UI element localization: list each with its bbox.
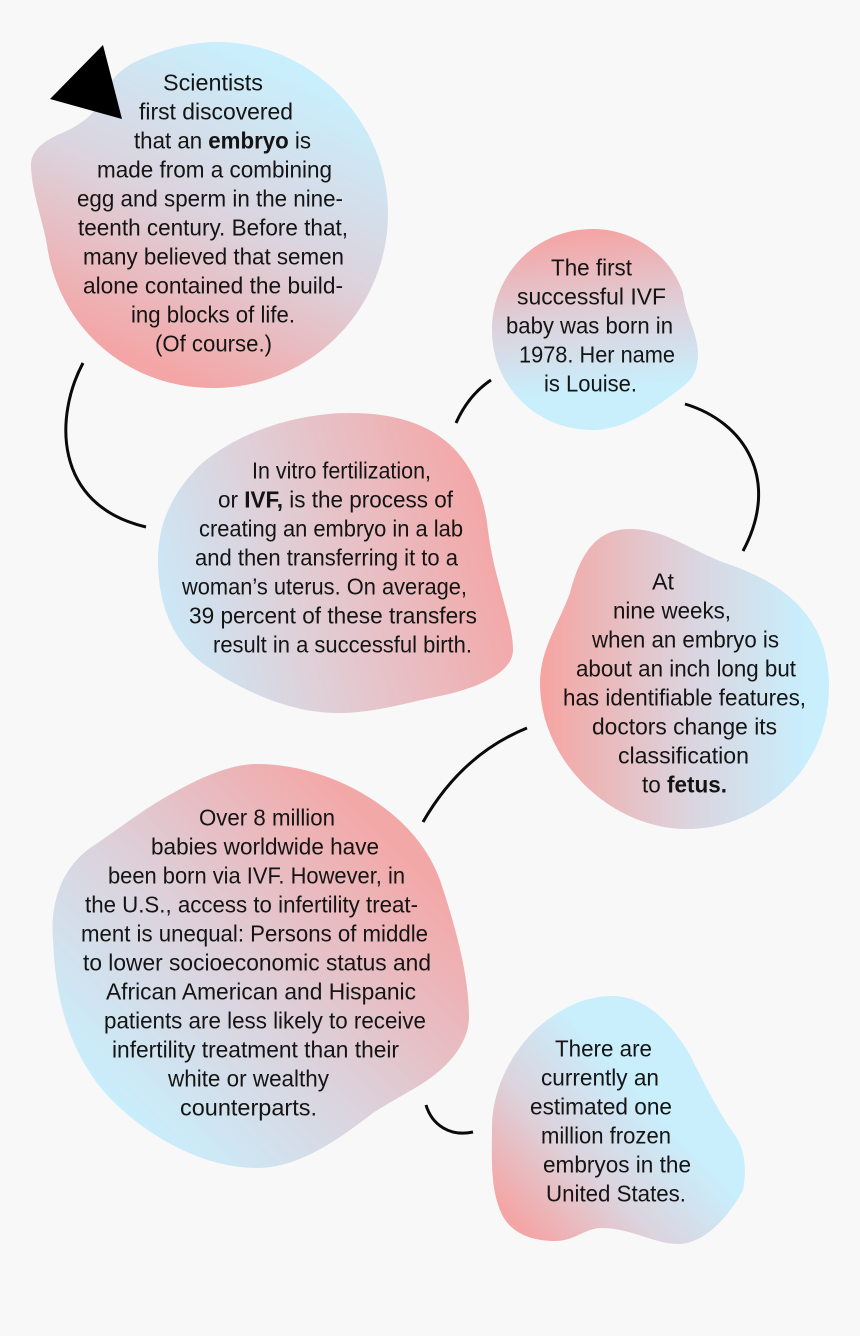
text: nine weeks fetus: At	[652, 568, 675, 594]
icon: black triangle arrowhead	[50, 45, 122, 119]
text: frozen embryos: million frozen	[541, 1122, 671, 1148]
arrow: babies worldwide to frozen embryos	[426, 1105, 473, 1133]
blob: babies worldwide and access	[52, 764, 469, 1168]
arrow: IVF to first baby	[456, 380, 491, 423]
text: embryo discovery: first discovered	[139, 98, 293, 124]
panel: babies worldwide and access	[52, 764, 469, 1168]
text: embryo discovery: egg and sperm in the nine-	[77, 186, 343, 212]
arrow: first baby to nine weeks	[685, 404, 759, 551]
arrow: embryo to IVF	[66, 363, 146, 527]
panel: nine weeks fetus	[540, 529, 829, 829]
text: nine weeks fetus: about an inch long but	[576, 656, 797, 682]
text: frozen embryos: United States.	[546, 1180, 686, 1206]
text: babies worldwide and access: Over 8 million	[199, 804, 335, 830]
text: embryo discovery: made from a combining	[97, 156, 332, 182]
text: what is IVF: 39 percent of these transfers	[189, 602, 477, 628]
blob: frozen embryos	[492, 996, 745, 1244]
text: first IVF baby: is Louise.	[544, 370, 637, 396]
text: frozen embryos	[530, 1036, 691, 1206]
text: first IVF baby: The first	[551, 254, 633, 280]
text: embryo discovery: Scientists	[163, 70, 263, 96]
text: nine weeks fetus	[563, 568, 806, 798]
text: babies worldwide and access: babies worldwide have	[151, 834, 379, 860]
text: frozen embryos: estimated one	[530, 1094, 672, 1120]
text: frozen embryos: currently an	[541, 1064, 659, 1090]
text: embryo discovery: that an embryo is	[134, 128, 311, 154]
panel: first IVF baby	[492, 229, 698, 430]
text: what is IVF: and then transferring it to a	[195, 544, 458, 570]
text: babies worldwide and access	[81, 804, 431, 1120]
text: nine weeks fetus: has identifiable features,	[563, 684, 806, 710]
text: embryo discovery	[77, 70, 348, 356]
text: babies worldwide and access: white or wealthy	[167, 1066, 329, 1092]
text: what is IVF: or IVF, is the process of	[218, 486, 454, 512]
text: nine weeks fetus: doctors change its	[592, 714, 777, 740]
text: embryo discovery: ing blocks of life.	[131, 302, 295, 328]
text: babies worldwide and access: infertility treatment than their	[112, 1036, 399, 1062]
text: babies worldwide and access: to lower socioeconomic status and	[83, 950, 431, 976]
text: nine weeks fetus: to fetus.	[642, 772, 727, 798]
panel: frozen embryos	[492, 996, 745, 1244]
text: babies worldwide and access: counterparts.	[180, 1094, 317, 1120]
text: what is IVF: creating an embryo in a lab	[199, 516, 463, 542]
blob: first IVF baby	[492, 229, 698, 430]
text: babies worldwide and access: African American and Hispanic	[106, 978, 416, 1004]
text: nine weeks fetus: classification	[618, 742, 749, 768]
text: what is IVF: result in a successful birth.	[213, 632, 472, 658]
text: nine weeks fetus: nine weeks,	[613, 598, 731, 624]
text: first IVF baby	[506, 254, 675, 396]
blob: what is IVF	[158, 413, 513, 713]
text: babies worldwide and access: ment is unequal: Persons of middle	[81, 920, 428, 946]
text: what is IVF	[181, 458, 477, 658]
panel: what is IVF	[158, 413, 513, 713]
text: embryo discovery: many believed that semen	[83, 244, 344, 270]
text: babies worldwide and access: the U.S., access to infertility treat-	[85, 892, 418, 918]
text: babies worldwide and access: patients are less likely to receive	[104, 1008, 426, 1034]
text: first IVF baby: successful IVF	[517, 284, 666, 310]
text: frozen embryos: embryos in the	[543, 1152, 691, 1178]
text: embryo discovery: teenth century. Before that,	[78, 214, 348, 240]
text: frozen embryos: There are	[555, 1036, 652, 1062]
arrow: fetus to babies worldwide	[423, 728, 527, 822]
text: first IVF baby: baby was born in	[506, 312, 673, 338]
blob: embryo discovery	[31, 42, 388, 388]
blob: nine weeks fetus	[540, 529, 829, 829]
text: what is IVF: woman’s uterus. On average,	[181, 574, 467, 600]
text: babies worldwide and access: been born via IVF. However, in	[108, 862, 405, 888]
text: first IVF baby: 1978. Her name	[519, 342, 675, 368]
text: nine weeks fetus: when an embryo is	[591, 626, 779, 652]
text: embryo discovery: alone contained the build-	[83, 272, 343, 298]
text: what is IVF: In vitro fertilization,	[252, 458, 431, 484]
panel: embryo discovery	[31, 42, 388, 388]
text: embryo discovery: (Of course.)	[155, 330, 272, 356]
